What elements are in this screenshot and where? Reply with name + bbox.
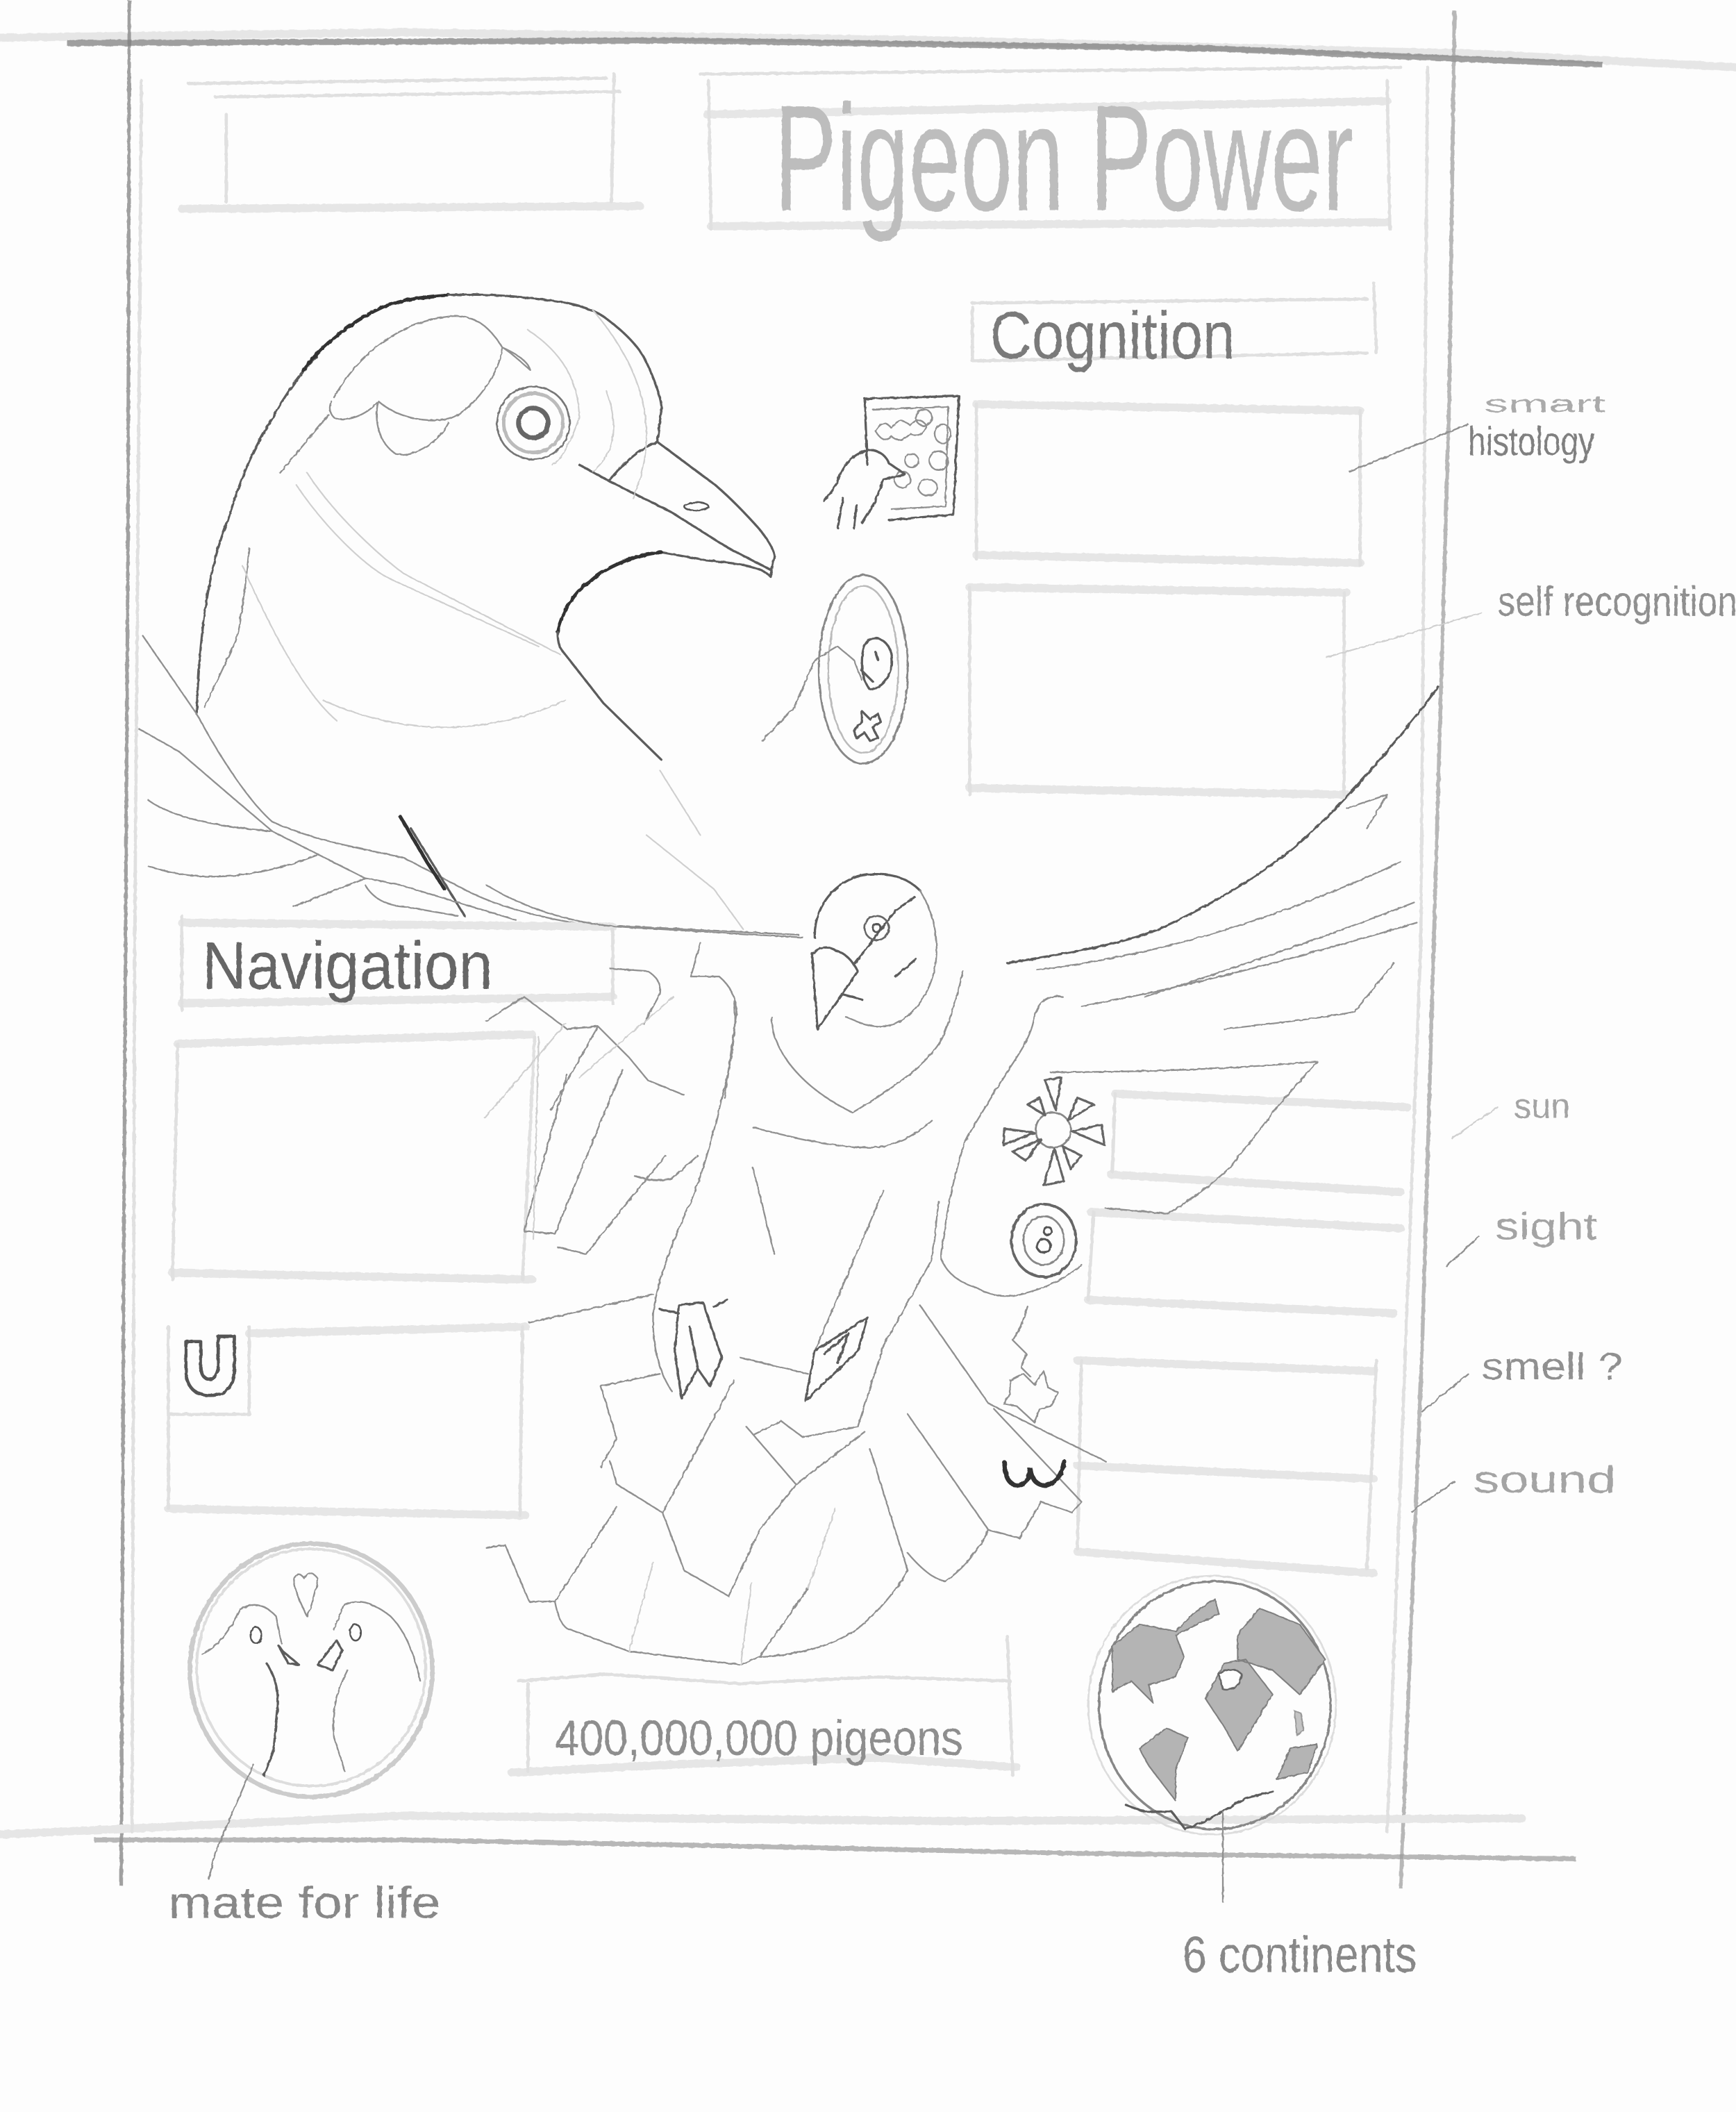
- note: smart histology: histology: [1468, 419, 1594, 465]
- population box: 400,000,000 pigeons: [555, 1711, 963, 1766]
- note: smell: [1422, 1345, 1623, 1412]
- note: sight: [1446, 1205, 1597, 1266]
- population box: [512, 1636, 1017, 1775]
- navigation text box: upper: [172, 1034, 535, 1279]
- cognition text box: histology: [976, 404, 1360, 566]
- note: sun: [1452, 1086, 1570, 1138]
- note: smart histology: smart: [1484, 390, 1605, 417]
- icon: magnet: [168, 1327, 249, 1414]
- header placeholder box: [182, 74, 640, 209]
- title: Pigeon Power: [774, 74, 1353, 243]
- leader line: mate for life: [209, 1765, 253, 1879]
- title: [701, 67, 1401, 243]
- icon: sound: [1005, 1461, 1064, 1486]
- icon: smell: [1003, 1306, 1058, 1422]
- note: sight: sight: [1495, 1205, 1597, 1247]
- icon: pigeon at mirror: [762, 575, 908, 764]
- heading: cognition: Cognition: [990, 297, 1235, 373]
- icon: pair of pigeons: [190, 1544, 433, 1797]
- icon: globe: [1088, 1576, 1336, 1834]
- heading: navigation: Navigation: [202, 928, 493, 1004]
- icon: histology slide with small pigeon: [824, 396, 959, 528]
- note: sound: [1412, 1458, 1616, 1511]
- note: sun: sun: [1514, 1086, 1570, 1126]
- heading: cognition: [972, 283, 1376, 373]
- note: smart histology: [1349, 390, 1605, 472]
- label: mate for life: mate for life: [168, 1878, 440, 1928]
- leader line: 6 continents: [1222, 1812, 1224, 1902]
- note: self recognition: [1326, 578, 1736, 657]
- note: sound: sound: [1474, 1458, 1616, 1501]
- label: 6 continents: 6 continents: [1183, 1925, 1417, 1983]
- cognition text box: self recognition: [969, 588, 1346, 795]
- icon: sun: [1003, 1078, 1104, 1186]
- note: smell: smell ?: [1481, 1345, 1623, 1388]
- small pigeon head: [812, 874, 937, 1029]
- illustration: flying pigeon: [485, 687, 1438, 1665]
- small pigeon feet: [660, 1300, 867, 1401]
- illustration: large pigeon head and neck: [139, 294, 799, 935]
- icon: eye: [1012, 1204, 1076, 1277]
- navigation text box: magnetism: [168, 1327, 525, 1515]
- small pigeon wings: [485, 687, 1438, 1254]
- sense text boxes: [1078, 1094, 1408, 1573]
- small pigeon tail: [486, 1295, 1105, 1665]
- small pigeon body: [653, 971, 1081, 1437]
- heading: navigation: [182, 916, 612, 1011]
